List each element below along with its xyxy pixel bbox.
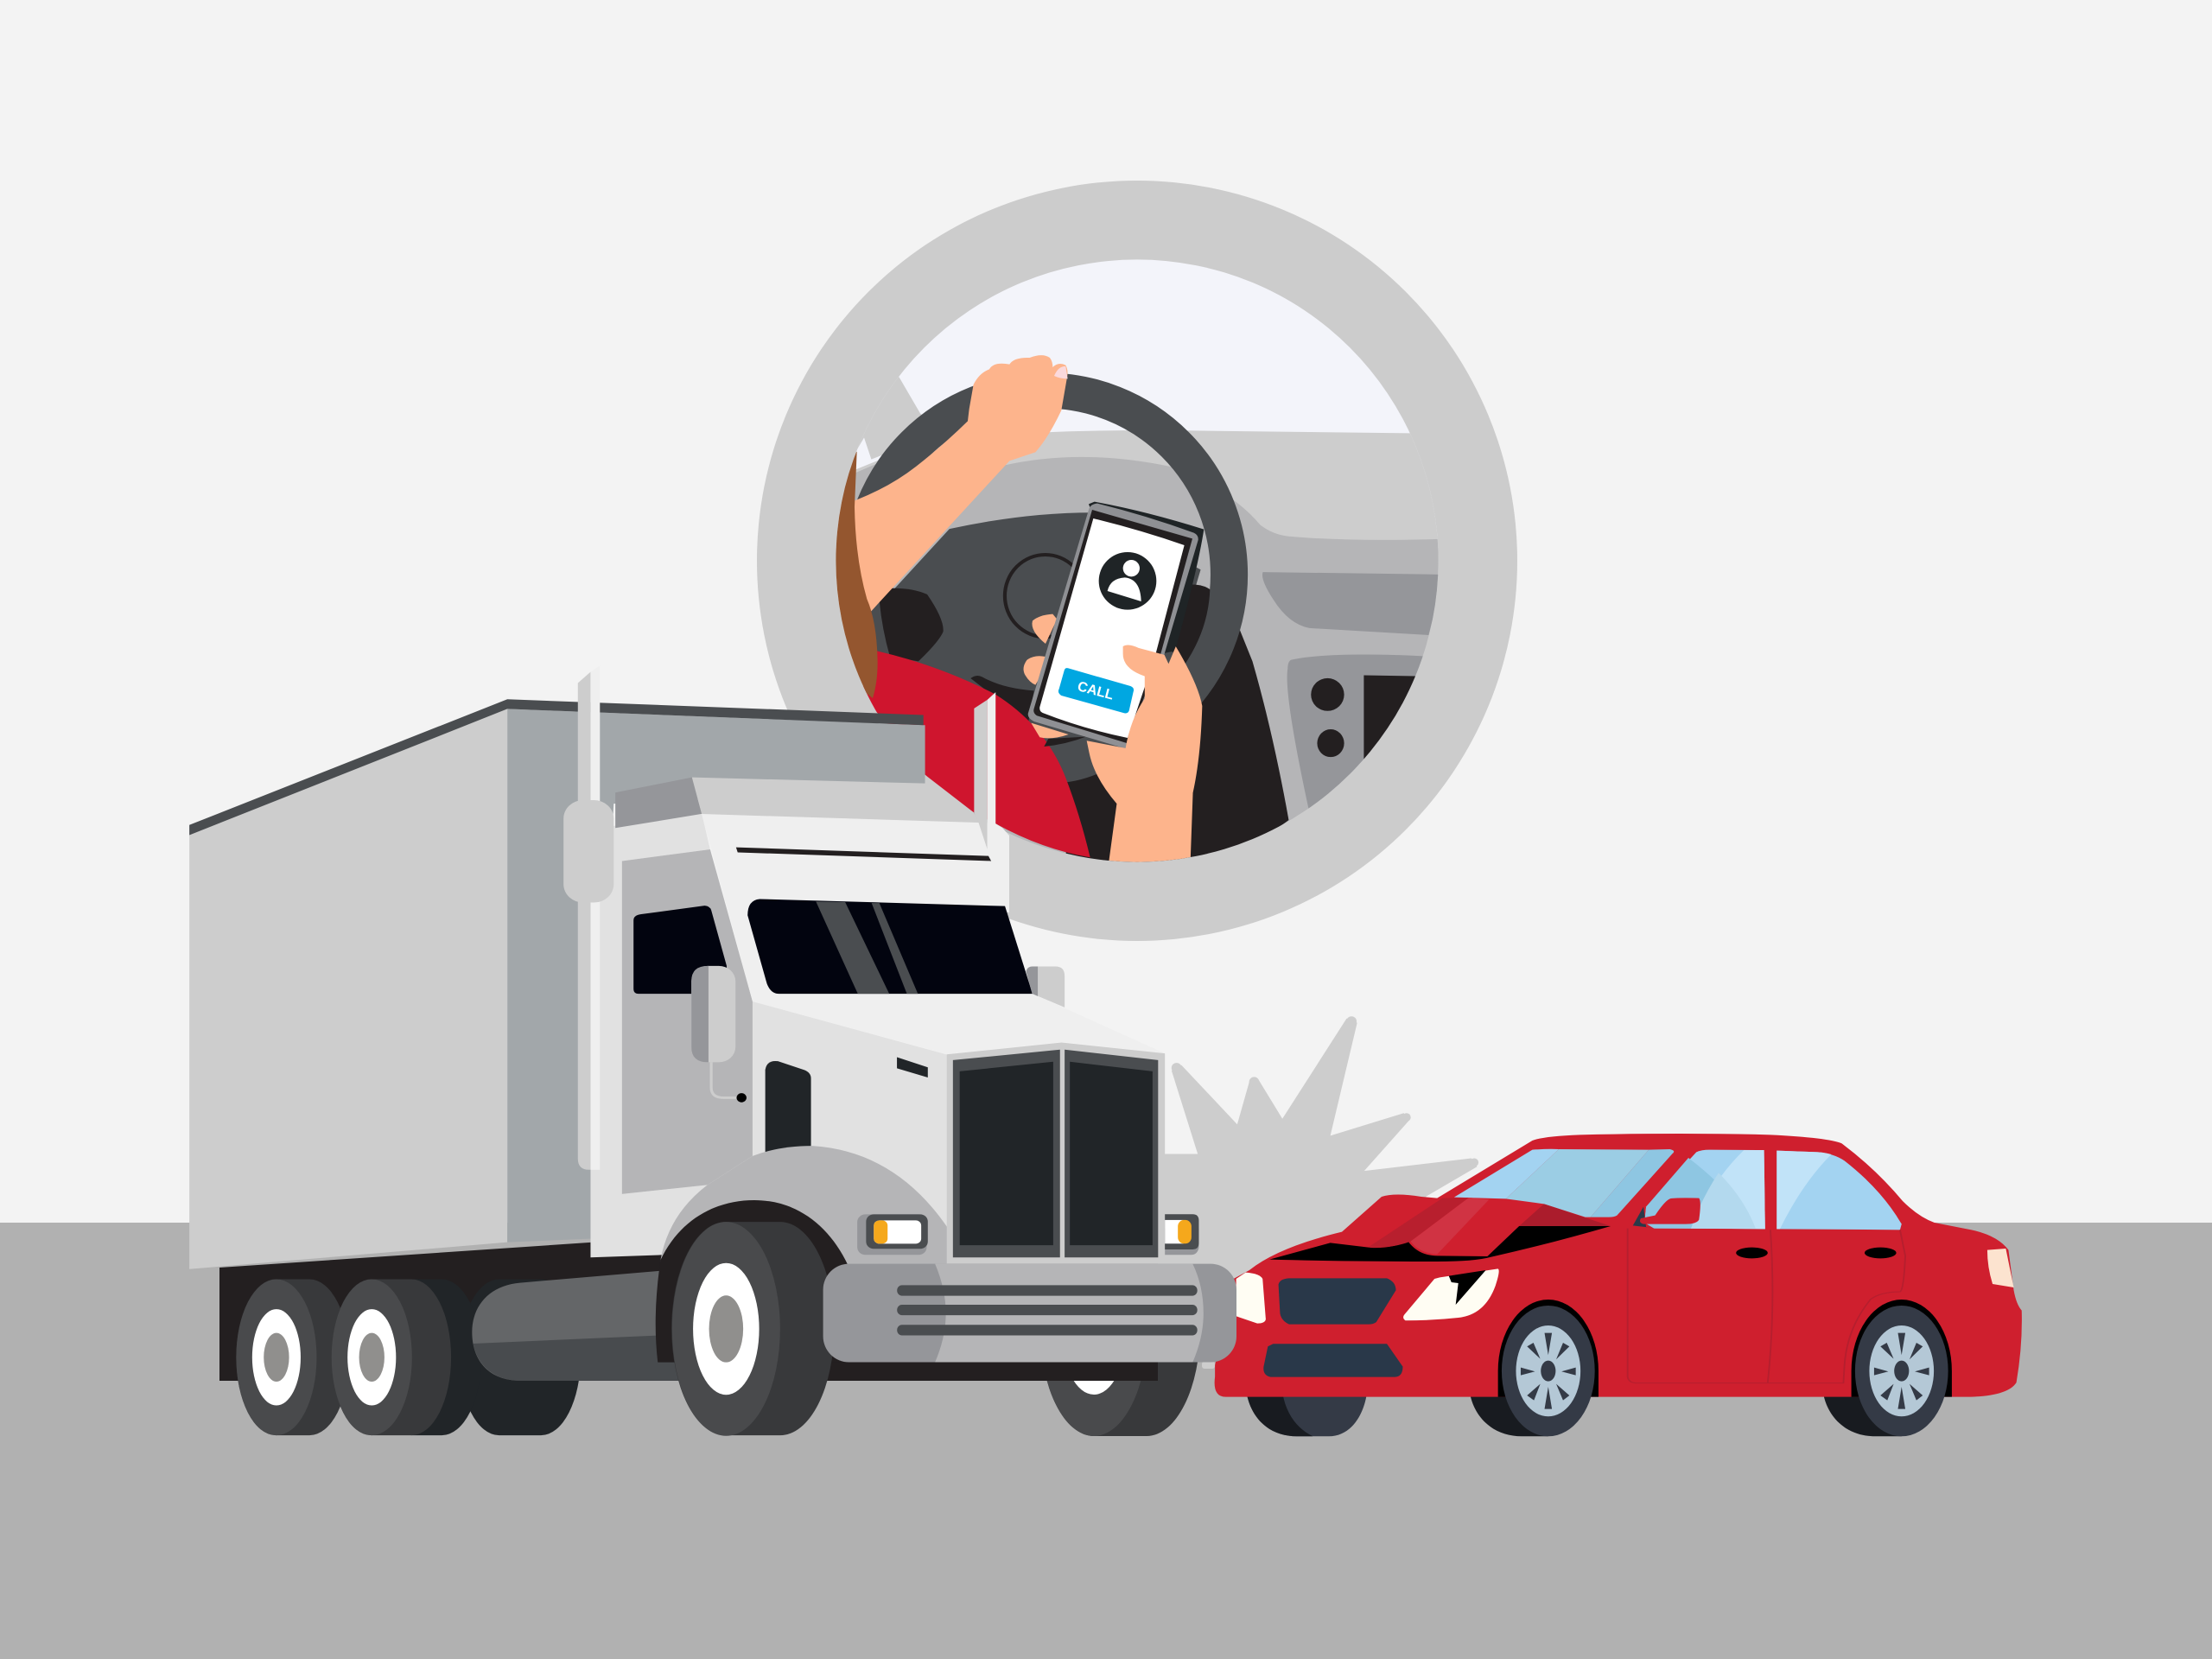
crumpled hood gap bbox=[1269, 1226, 1611, 1262]
second exhaust stack bbox=[974, 692, 995, 849]
air vent bbox=[1262, 572, 1444, 635]
car rear wheel bbox=[1855, 1306, 1948, 1436]
bumper bars bbox=[897, 1285, 1198, 1335]
band under phone bbox=[1044, 737, 1086, 747]
right broken headlight bbox=[1403, 1268, 1499, 1320]
trailer front bbox=[507, 709, 925, 1243]
fingers behind phone bbox=[1024, 614, 1069, 738]
sky through windshield bbox=[836, 259, 1438, 662]
hood crease dark bbox=[1369, 1198, 1469, 1248]
call button bbox=[1058, 668, 1134, 713]
small hood vent bbox=[897, 1057, 928, 1077]
side vent bbox=[766, 1061, 811, 1156]
tail light bbox=[1987, 1249, 2014, 1287]
thumbnail bbox=[1054, 366, 1068, 378]
exhaust stack bbox=[563, 666, 613, 1170]
right headlight bbox=[1165, 1214, 1198, 1255]
impact starburst bbox=[1157, 1016, 1478, 1298]
horn ring bbox=[1002, 553, 1073, 639]
side mirror bbox=[691, 966, 747, 1103]
car body bbox=[1215, 1134, 2022, 1397]
car near wheels back bbox=[1470, 1394, 1902, 1436]
door panel bbox=[622, 849, 753, 1194]
front side window bbox=[1644, 1150, 1765, 1229]
lower grille bbox=[1263, 1344, 1402, 1377]
hood side bbox=[753, 1001, 947, 1260]
second rear wheel bbox=[332, 1279, 481, 1435]
left arm and hand on wheel bbox=[847, 355, 1068, 614]
left spoke shadow bbox=[880, 588, 944, 661]
red shirt sleeve bbox=[858, 651, 1090, 857]
rear side window bbox=[1777, 1151, 1902, 1230]
front wheel arch bbox=[1498, 1300, 1599, 1397]
truck far front wheel bbox=[1040, 1263, 1200, 1436]
cab rear column bbox=[590, 814, 710, 1257]
steering wheel rim bbox=[861, 391, 1230, 759]
side mirror bbox=[1633, 1198, 1700, 1229]
windshield glare bbox=[816, 901, 918, 994]
windshield pillar bbox=[858, 377, 921, 460]
right hand holding phone bbox=[1087, 645, 1202, 865]
grille frame bbox=[947, 1043, 1165, 1264]
first rear wheel bbox=[236, 1279, 349, 1435]
steering column dark area bbox=[1066, 631, 1289, 862]
background wall bbox=[0, 0, 2212, 1223]
truck chassis bbox=[219, 1236, 1158, 1381]
roof slit bbox=[736, 848, 991, 861]
truck front bumper bbox=[823, 1264, 1236, 1363]
contact icon bbox=[1099, 552, 1156, 610]
right spoke shadow bbox=[1170, 584, 1210, 664]
trailer top edge bbox=[189, 699, 924, 836]
dashboard top bbox=[855, 430, 1438, 714]
fuel tank bbox=[472, 1270, 680, 1381]
grille right bbox=[1065, 1050, 1158, 1257]
sky sliver bbox=[856, 438, 871, 460]
car front wheel bbox=[1502, 1306, 1595, 1436]
dash corner bbox=[842, 464, 876, 500]
grille left bbox=[953, 1050, 1060, 1257]
door seams bbox=[1628, 1229, 1905, 1383]
road ground bbox=[0, 1223, 2212, 1659]
hood flap bbox=[1519, 1204, 1611, 1226]
call button: CALL bbox=[1076, 679, 1116, 703]
left headlight bbox=[857, 1214, 928, 1255]
left headlight bbox=[1236, 1273, 1266, 1324]
smartphone bbox=[1028, 502, 1204, 749]
lower hub arc bbox=[970, 676, 1034, 723]
cab front panel and hood bbox=[702, 814, 1165, 1054]
panel: driver view inside the ring bbox=[836, 259, 1438, 862]
hair bbox=[836, 451, 878, 698]
trailer side bbox=[189, 709, 507, 1269]
red car bbox=[1215, 1134, 2022, 1436]
door handles bbox=[1736, 1248, 1897, 1258]
console knobs bbox=[1311, 678, 1344, 757]
near front wheel bbox=[671, 1222, 834, 1436]
third rear wheel bbox=[460, 1279, 581, 1435]
steering wheel hub bbox=[864, 512, 1201, 783]
sleeper top dark bbox=[615, 778, 702, 828]
console screen bbox=[1363, 676, 1415, 759]
windshield bbox=[1454, 1149, 1674, 1217]
ring: magnified view frame bbox=[757, 181, 1517, 941]
right mirror bbox=[1026, 966, 1065, 1007]
car far front tire bbox=[1247, 1394, 1367, 1436]
door window bbox=[633, 906, 727, 994]
bumper center bbox=[935, 1264, 1204, 1363]
roof band bbox=[692, 775, 978, 823]
rear wheel arch bbox=[1852, 1300, 1952, 1397]
dashboard lower bbox=[892, 457, 1438, 861]
hood crease light bbox=[1411, 1198, 1489, 1255]
fender bbox=[660, 1146, 947, 1270]
center console bbox=[1287, 655, 1422, 809]
wheel arch bbox=[656, 1200, 848, 1363]
windshield bbox=[747, 899, 1033, 994]
truck bbox=[189, 666, 1215, 1436]
upper grille bbox=[1279, 1278, 1395, 1325]
small bumper bracket bbox=[1202, 1361, 1215, 1369]
